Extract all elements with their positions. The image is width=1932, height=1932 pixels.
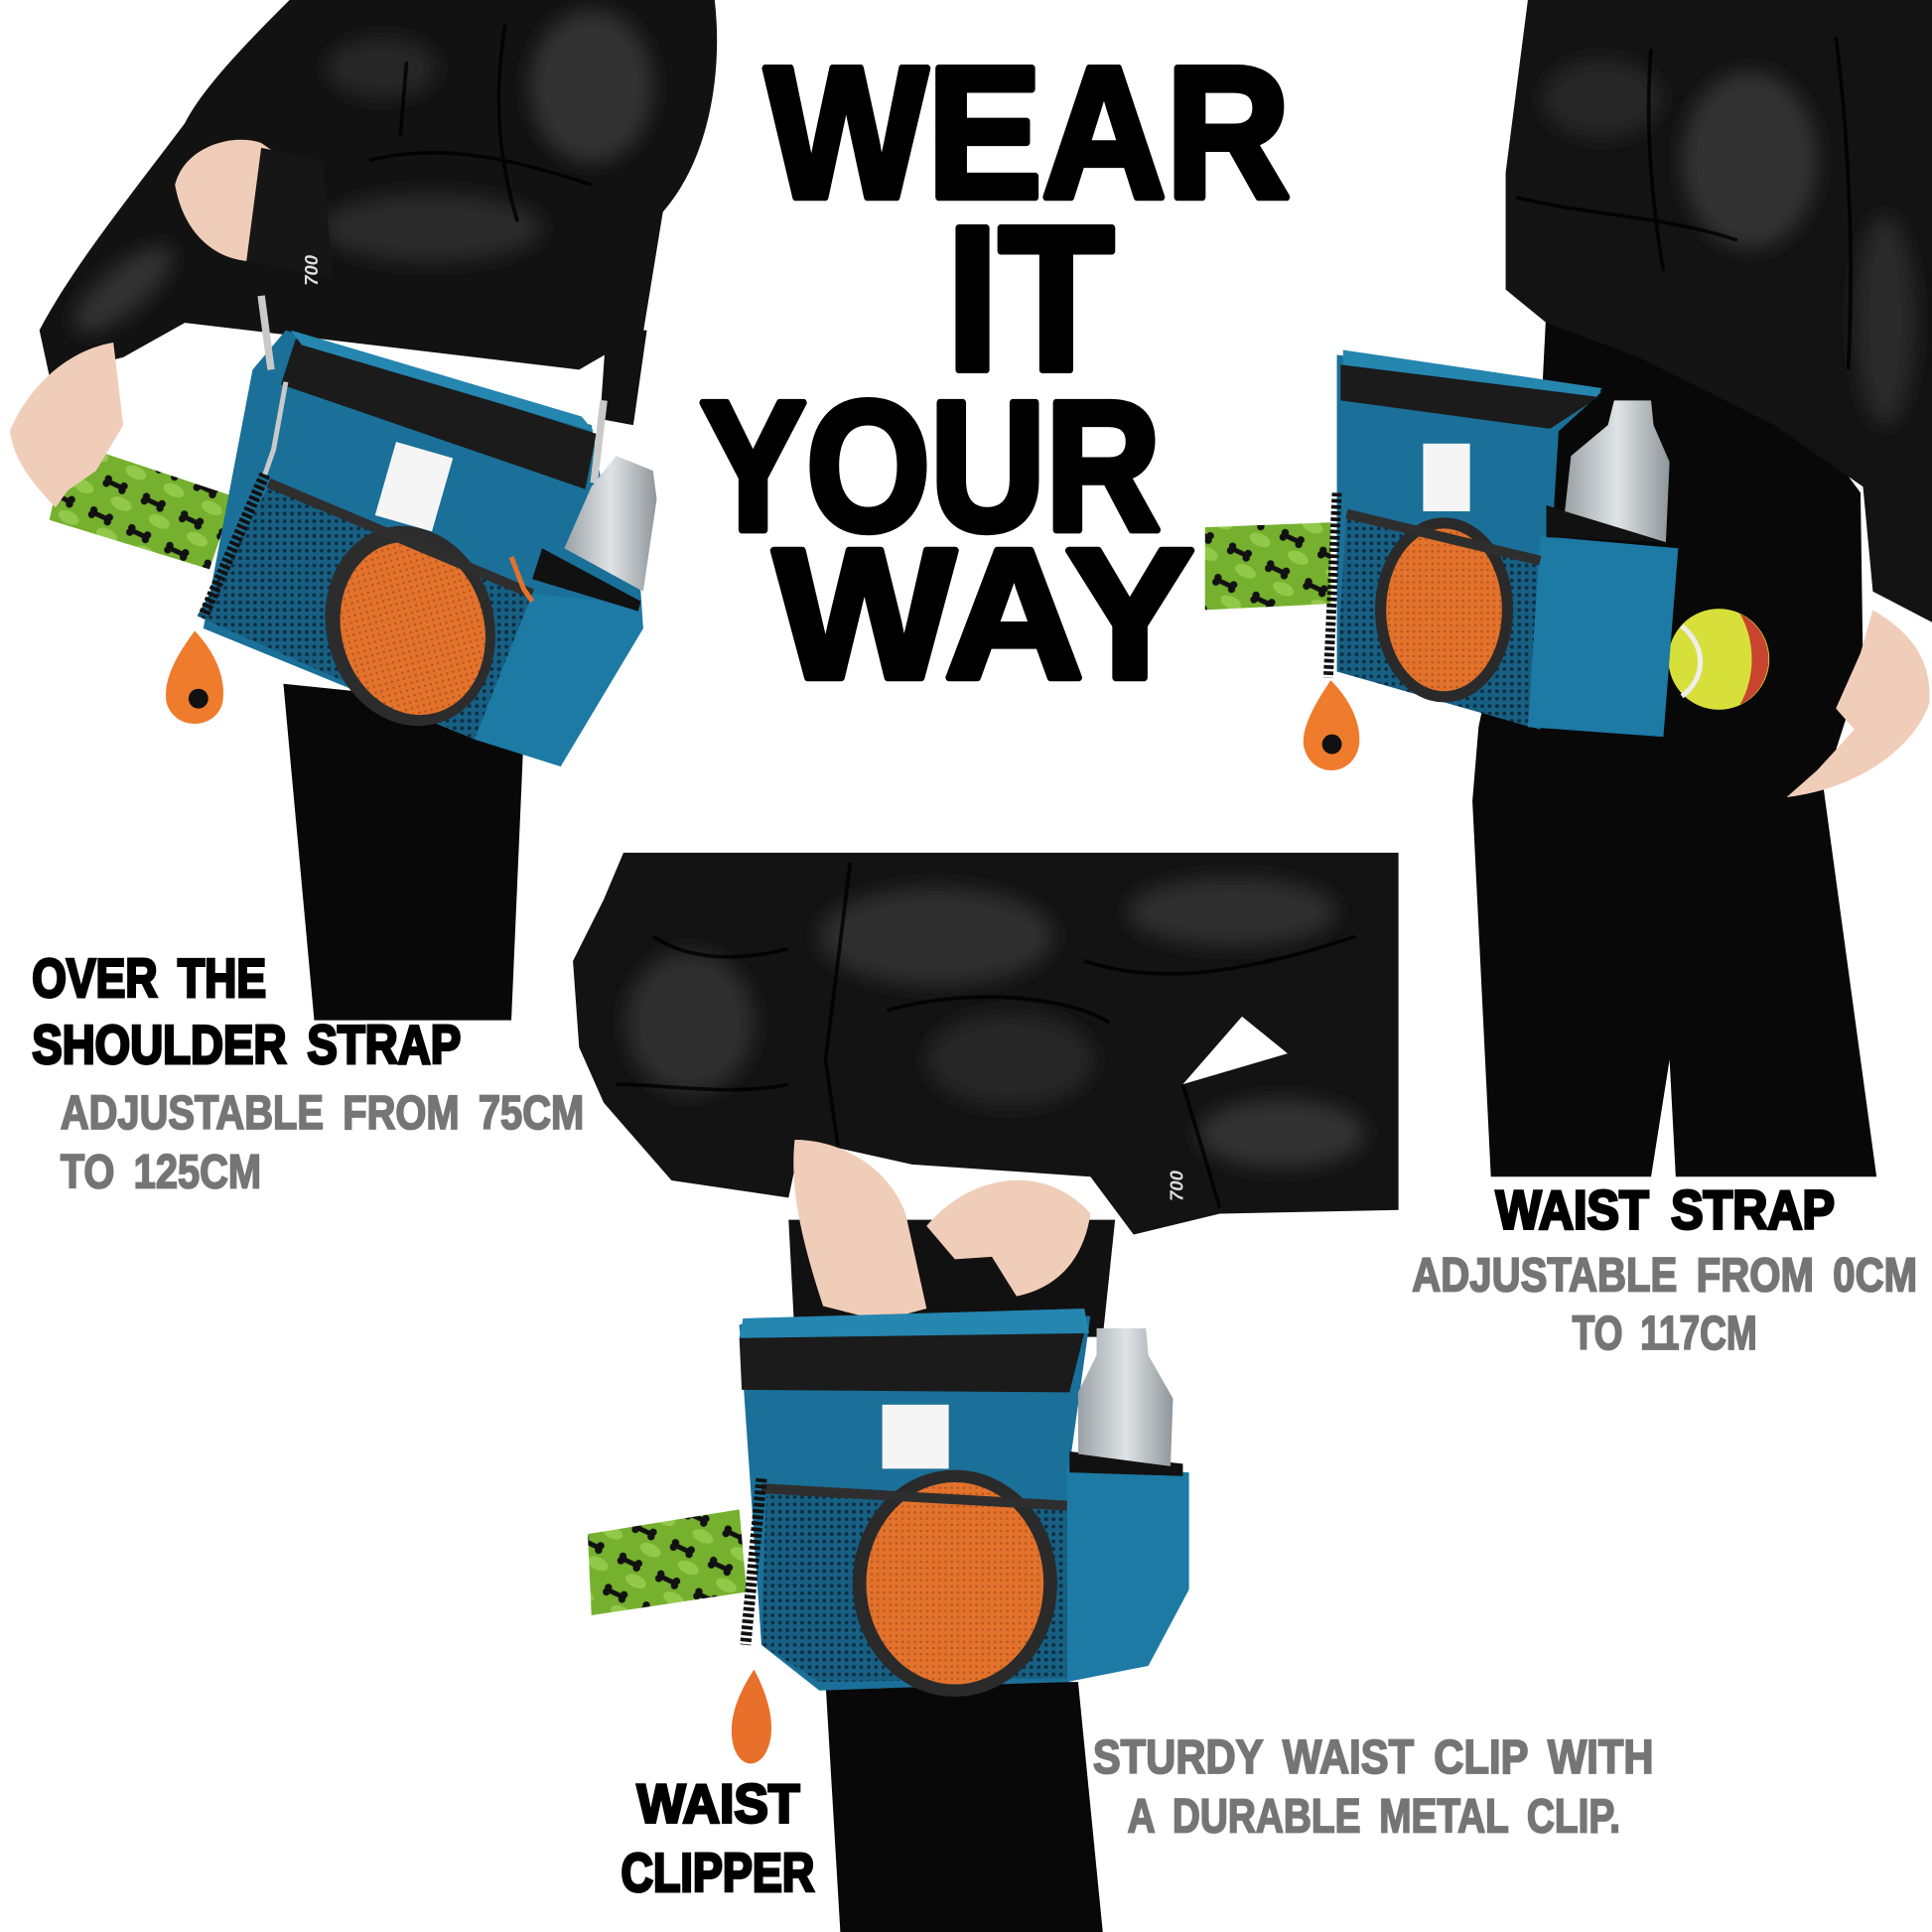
hand on strap [175,140,277,261]
detail line two: TO 117CM [1573,1307,1757,1360]
caption: over the shoulder strap [32,948,584,1198]
detail line two: A DURABLE METAL CLIP. [1128,1789,1620,1843]
heading line two: CLIPPER [621,1843,814,1903]
title line: wear: WEAR [765,28,1290,237]
tennis ball [1668,609,1769,710]
water bottle [564,456,656,592]
clicker [166,630,223,724]
heading: WAIST STRAP [1496,1179,1835,1240]
torso [788,1220,1115,1337]
heading line one: WAIST [637,1774,799,1835]
jacket [40,0,717,376]
hand pulling bag [10,343,123,507]
cuff [246,148,333,277]
poop bag roll [1205,522,1330,610]
bag [1328,349,1678,737]
leg [283,684,525,1021]
sleeve marking: 700 [301,254,322,286]
figure: waist clipper [573,853,1399,1932]
title line: way: WAY [773,511,1194,718]
jacket [573,853,1399,1235]
hand [1787,610,1930,797]
heading line one: OVER THE [32,948,266,1009]
poop bag roll [588,1509,747,1615]
figure: over the shoulder strap [10,0,717,1021]
caption: waist clipper [621,1774,814,1903]
detail line one: ADJUSTABLE FROM 75CM [61,1086,584,1140]
caption: waist strap [1412,1179,1917,1360]
bag [740,1309,1189,1697]
detail line one: STURDY WAIST CLIP WITH [1093,1730,1654,1784]
right hand [926,1180,1090,1297]
jacket [1506,0,1932,622]
detail line two: TO 125CM [61,1145,261,1198]
title line: your: YOUR [700,363,1161,570]
figure: waist strap [1205,0,1932,1176]
water bottle [1565,400,1670,542]
sleeve marking: 700 [1166,1170,1186,1201]
title line: it: IT [946,183,1114,413]
heading line two: SHOULDER STRAP [32,1015,461,1075]
shoulder strap [600,331,647,425]
legs [826,1682,1103,1932]
clicker [1304,680,1359,770]
water bottle [1078,1328,1173,1466]
strap clip [261,296,604,483]
poop bag roll [50,441,234,569]
title [700,28,1290,718]
clicker [732,1670,771,1763]
left hand [793,1140,926,1320]
legs [1472,308,1876,1176]
bag [198,331,643,766]
caption: sturdy waist clip [1093,1730,1654,1843]
